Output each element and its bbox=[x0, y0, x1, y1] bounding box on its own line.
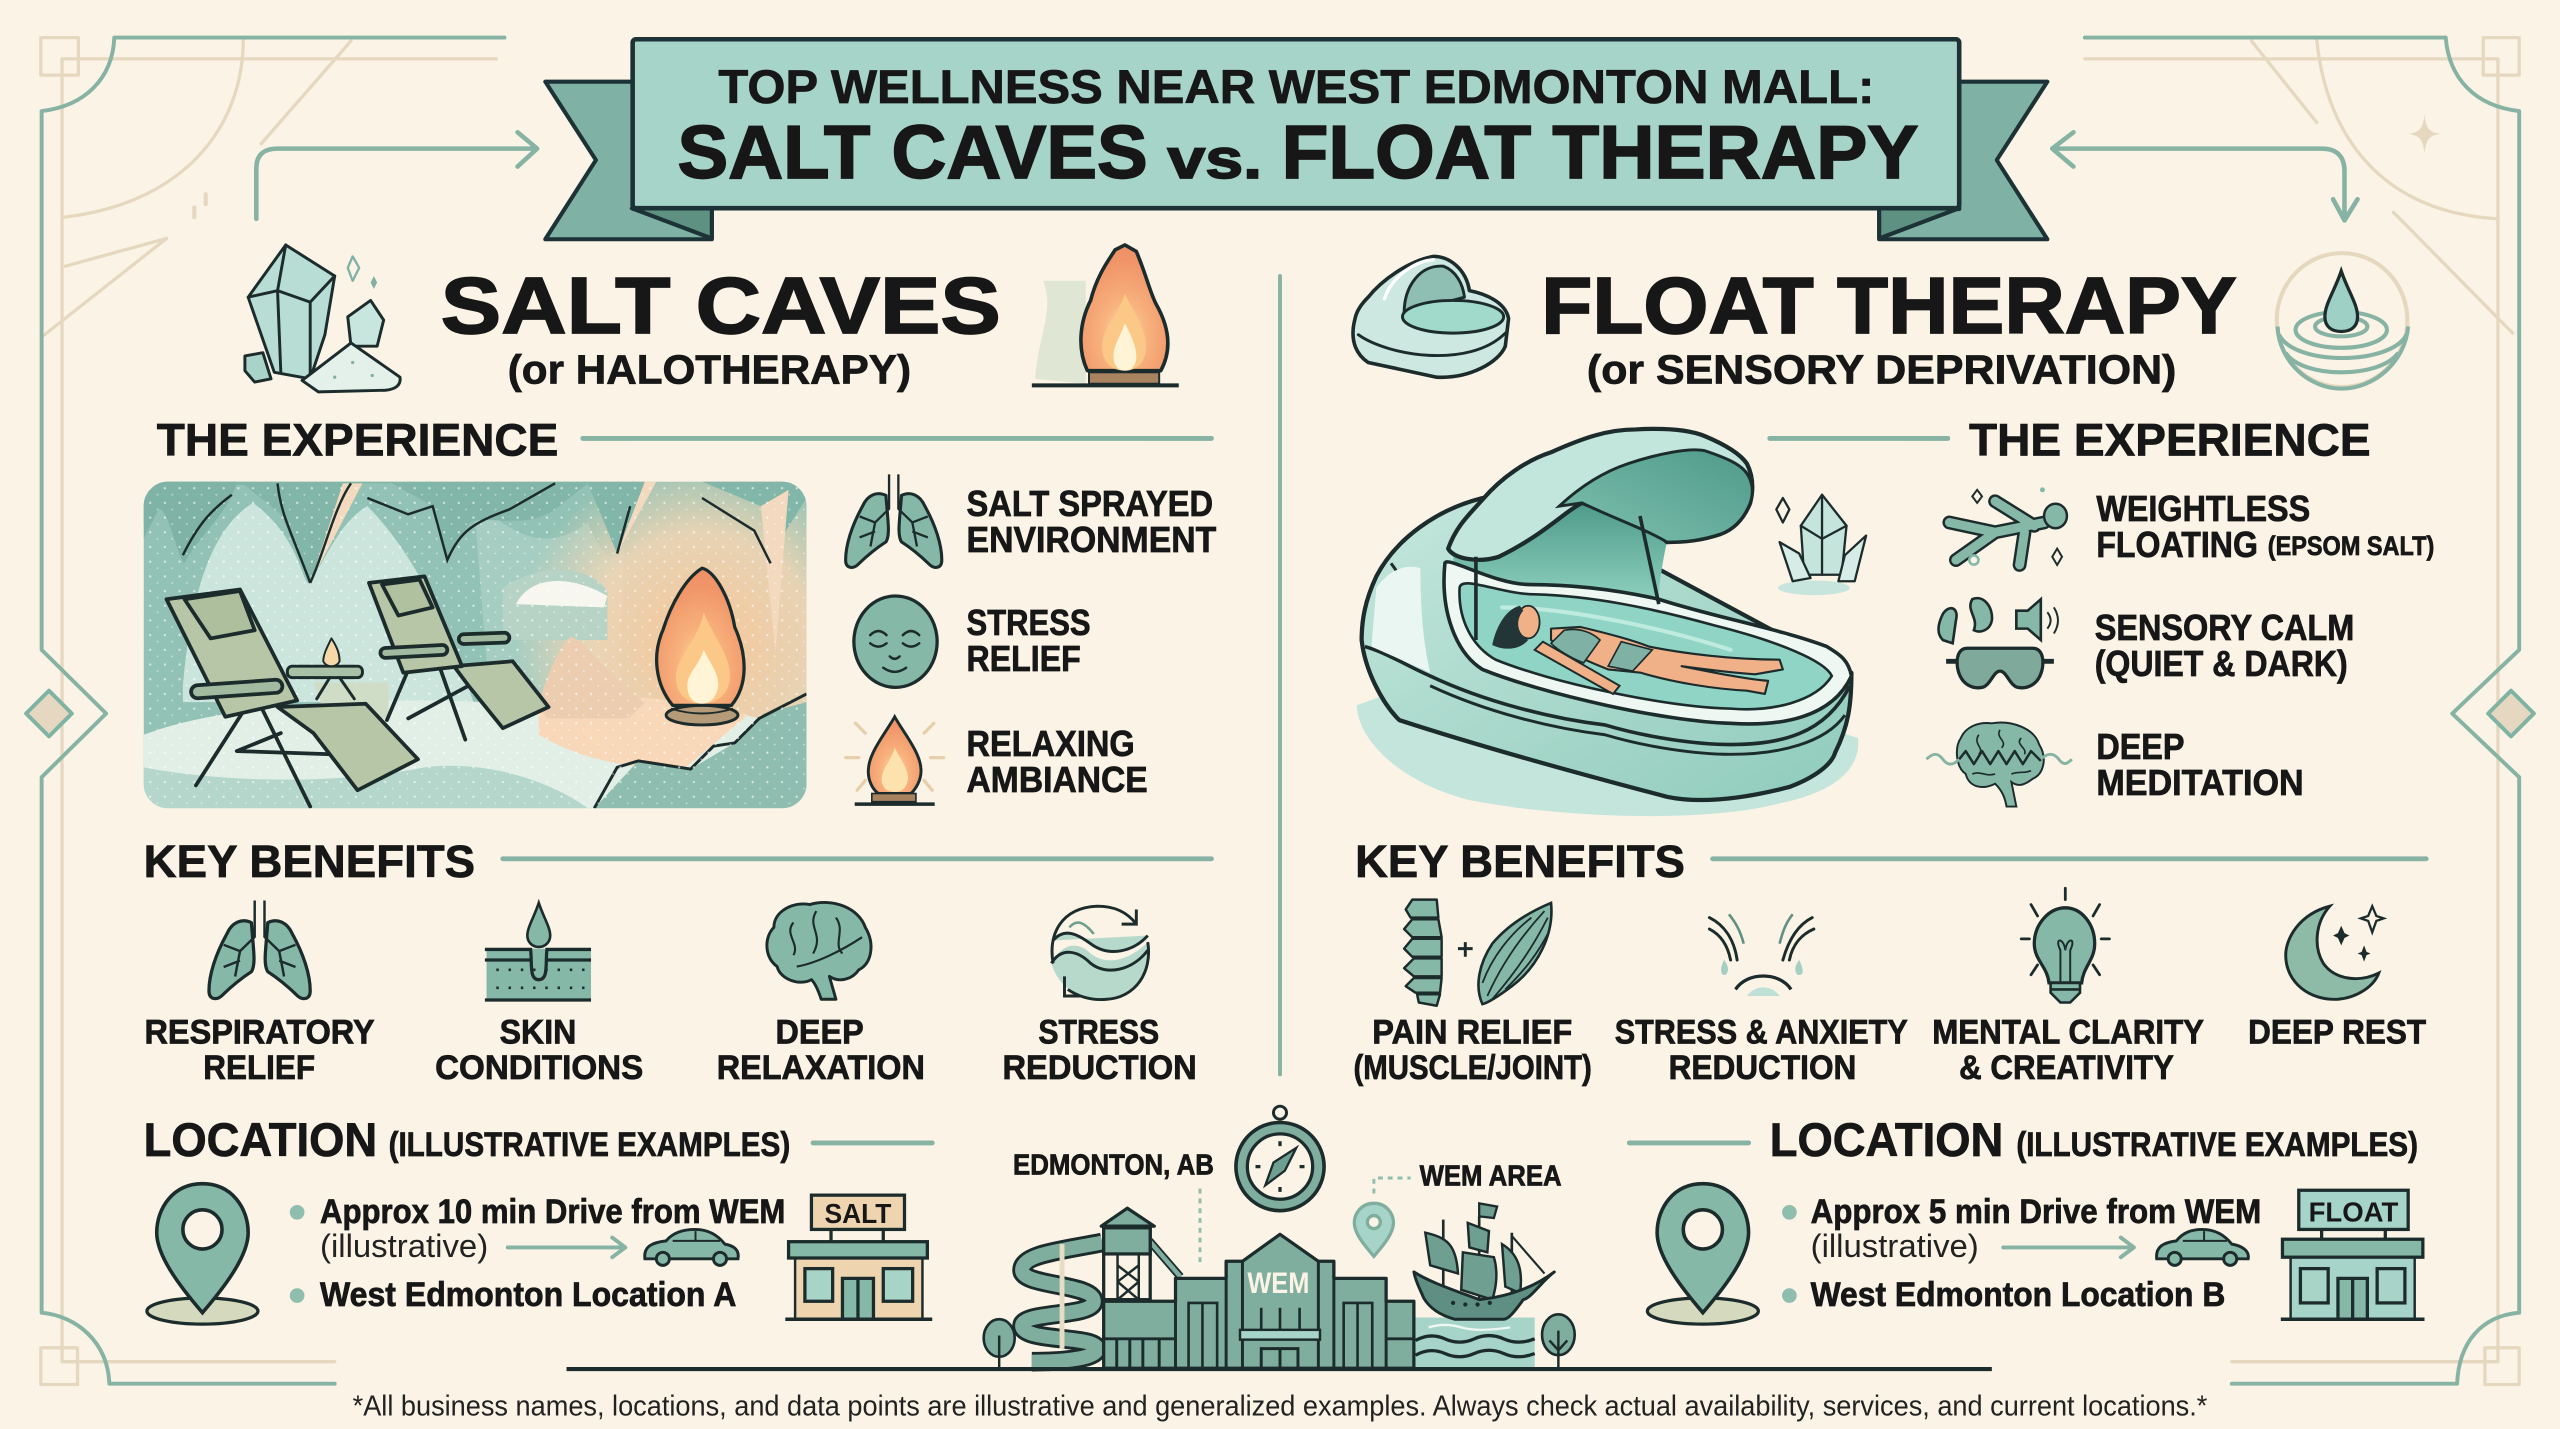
label note: (EPSOM SALT) bbox=[2268, 531, 2434, 561]
icon: tree, left bbox=[984, 1319, 1015, 1368]
title line 2 bbox=[678, 110, 1918, 194]
title line 2: vs. bbox=[1167, 128, 1262, 190]
glowing salt lamp bbox=[657, 568, 744, 725]
water bbox=[1459, 583, 1832, 709]
label: WEM area: WEM AREA bbox=[1420, 1160, 1562, 1192]
icon: lungs bbox=[846, 474, 942, 567]
small table and candle bbox=[287, 638, 389, 718]
label: DEEP bbox=[776, 1013, 864, 1051]
bullet bbox=[1782, 1288, 1797, 1303]
icon: skin layers with droplet bbox=[485, 903, 591, 1001]
ground line bbox=[567, 1368, 1992, 1370]
label line 2: REDUCTION bbox=[1669, 1049, 1856, 1087]
icon: car bbox=[2157, 1229, 2248, 1265]
experience item: weightless floating bbox=[1949, 487, 2434, 565]
benefit: pain relief bbox=[1353, 900, 1592, 1087]
label line 2: REDUCTION bbox=[1002, 1049, 1197, 1087]
label: RESPIRATORY bbox=[144, 1013, 375, 1051]
experience item: stress relief bbox=[854, 596, 1091, 687]
benefit: deep rest bbox=[2248, 906, 2426, 1051]
bullet bbox=[1782, 1205, 1797, 1220]
label: Edmonton, AB: EDMONTON, AB bbox=[1013, 1150, 1214, 1182]
label line 2: MEDITATION bbox=[2096, 762, 2304, 803]
note: (illustrative) bbox=[320, 1227, 488, 1264]
label: DEEP bbox=[2096, 726, 2184, 767]
note: (illustrative) bbox=[1811, 1227, 1979, 1264]
icon: brain bbox=[767, 903, 871, 999]
drive time: Approx 10 min Drive from WEM bbox=[320, 1193, 785, 1231]
label: PAIN RELIEF bbox=[1372, 1013, 1572, 1051]
bullet bbox=[290, 1288, 304, 1303]
mall building: WEM bbox=[1247, 1267, 1309, 1300]
experience item: relaxing ambiance bbox=[846, 717, 1148, 804]
drive time: Approx 5 min Drive from WEM bbox=[1811, 1193, 2261, 1231]
label line 2: ENVIRONMENT bbox=[967, 519, 1216, 560]
icon: galleon ship bbox=[1414, 1203, 1554, 1319]
arrow to car bbox=[2003, 1238, 2134, 1257]
icon: compass bbox=[1236, 1106, 1324, 1211]
benefit: skin conditions bbox=[435, 903, 643, 1087]
icon: moon and stars bbox=[2286, 906, 2384, 999]
label: SENSORY CALM bbox=[2095, 607, 2354, 648]
label line 2: RELIEF bbox=[203, 1049, 315, 1087]
icon: brain with wave bbox=[1927, 723, 2072, 807]
icon: WEM area pin bbox=[1354, 1203, 1393, 1256]
section heading: the experience, left: THE EXPERIENCE bbox=[157, 415, 558, 466]
illustration: float pod bbox=[1357, 429, 1858, 816]
icon: salt storefront: SALT bbox=[824, 1198, 891, 1229]
icon: water drop with ripples bbox=[2277, 253, 2408, 389]
icon: map pin bbox=[147, 1184, 258, 1324]
pod lower band bbox=[1365, 647, 1850, 745]
lounger, back bbox=[369, 576, 549, 740]
lounger, front bbox=[167, 589, 418, 807]
label: DEEP REST bbox=[2248, 1013, 2426, 1051]
location heading bbox=[144, 1114, 932, 1167]
label: MENTAL CLARITY bbox=[1932, 1013, 2204, 1051]
water slide tower bbox=[1022, 1208, 1180, 1362]
subheading: halotherapy: (or HALOTHERAPY) bbox=[508, 347, 911, 393]
hood bbox=[1448, 429, 1752, 560]
label line 2: & CREATIVITY bbox=[1959, 1049, 2174, 1087]
location heading: (ILLUSTRATIVE EXAMPLES) bbox=[2016, 1126, 2418, 1164]
benefit: deep relaxation bbox=[717, 903, 925, 1087]
icon: map pin bbox=[1647, 1184, 1758, 1324]
icon: lungs bbox=[209, 900, 310, 999]
section heading: the experience, right: THE EXPERIENCE bbox=[1969, 415, 2371, 466]
hood struts bbox=[1476, 516, 1659, 640]
icon: car bbox=[645, 1229, 738, 1265]
icon: mini float pod bbox=[1353, 256, 1509, 377]
central divider bbox=[1279, 276, 1281, 1074]
title line 2: SALT CAVES bbox=[678, 110, 1148, 194]
location: salt caves bbox=[144, 1114, 932, 1324]
right ribbon bbox=[1879, 82, 2047, 239]
illustration: salt cave with loungers and lamp bbox=[144, 482, 807, 808]
title banner bbox=[545, 39, 2047, 239]
section heading: key benefits, right: KEY BENEFITS bbox=[1355, 836, 1685, 887]
location heading bbox=[1629, 1114, 2418, 1167]
location: float therapy bbox=[1629, 1114, 2424, 1324]
heading: salt caves: SALT CAVES bbox=[441, 261, 1001, 350]
experience item: salt sprayed environment bbox=[846, 474, 1216, 567]
icon: crystal cluster bbox=[1776, 495, 1866, 595]
pod shadow bbox=[1357, 694, 1858, 816]
icon: spine and muscle bbox=[1404, 900, 1551, 1006]
experience item: deep meditation bbox=[1927, 723, 2304, 807]
dotted leader lines bbox=[1200, 1178, 1411, 1262]
icon: salt crystals bbox=[245, 245, 400, 392]
arrow: banner to top right bbox=[2052, 132, 2358, 220]
heading: float therapy: FLOAT THERAPY bbox=[1541, 261, 2237, 350]
footnote: *All business names, locations, and data points are illustrative and generalized examples. Always check actual availability, services, and current locations.* bbox=[353, 1391, 2207, 1423]
location heading: LOCATION bbox=[1770, 1114, 2003, 1167]
label: RELAXING bbox=[967, 723, 1135, 764]
icon: ears, speaker and eye mask bbox=[1939, 598, 2058, 688]
icon: light bulb bbox=[2021, 888, 2109, 1002]
label: STRESS & ANXIETY bbox=[1615, 1013, 1908, 1051]
icon: float storefront: FLOAT bbox=[2309, 1196, 2398, 1227]
label line 2: (MUSCLE/JOINT) bbox=[1353, 1049, 1592, 1087]
benefit: respiratory relief bbox=[144, 900, 375, 1087]
title line 2: FLOAT THERAPY bbox=[1282, 110, 1918, 194]
icon: floating figure bbox=[1949, 487, 2067, 565]
mall building bbox=[1104, 1234, 1414, 1368]
icon: waves in cycle arrows bbox=[1051, 906, 1149, 1000]
label: SKIN bbox=[500, 1013, 576, 1051]
icon: tree, right bbox=[1542, 1314, 1575, 1368]
location heading: (ILLUSTRATIVE EXAMPLES) bbox=[389, 1126, 790, 1164]
section heading: key benefits, left: KEY BENEFITS bbox=[144, 836, 475, 887]
label: STRESS bbox=[967, 602, 1091, 643]
floating person bbox=[1492, 606, 1783, 694]
label: WEIGHTLESS bbox=[2096, 488, 2310, 529]
label line 2: RELIEF bbox=[967, 638, 1081, 679]
arrow: top left to banner bbox=[256, 132, 537, 219]
icon: easing tension bbox=[1709, 914, 1814, 996]
icon: flame bbox=[846, 717, 944, 804]
decorative frame: right bbox=[2085, 38, 2534, 1385]
left ribbon bbox=[545, 82, 712, 239]
label line 2: (QUIET & DARK) bbox=[2095, 643, 2348, 684]
label line 2: CONDITIONS bbox=[435, 1049, 643, 1087]
title line 1: TOP WELLNESS NEAR WEST EDMONTON MALL: bbox=[718, 61, 1874, 114]
label: STRESS bbox=[1038, 1013, 1159, 1051]
label line 2: FLOATING bbox=[2096, 524, 2258, 565]
address: West Edmonton Location B bbox=[1811, 1276, 2225, 1314]
benefit: stress and anxiety reduction bbox=[1615, 914, 1908, 1087]
subheading: sensory deprivation: (or SENSORY DEPRIVATION) bbox=[1587, 347, 2176, 393]
tub rim bbox=[1444, 562, 1851, 724]
pod interior wall bbox=[1453, 503, 1667, 601]
icon: salt lamp bbox=[1032, 245, 1179, 385]
location heading: LOCATION bbox=[144, 1114, 377, 1167]
icon: float storefront bbox=[2281, 1190, 2424, 1319]
banner panel bbox=[633, 39, 1959, 208]
experience item: sensory calm bbox=[1939, 598, 2354, 688]
label: SALT SPRAYED bbox=[967, 483, 1213, 524]
decorative frame: left bbox=[26, 38, 504, 1385]
icon: salt storefront bbox=[785, 1195, 932, 1319]
label line 2: RELAXATION bbox=[717, 1049, 925, 1087]
benefit: mental clarity and creativity bbox=[1932, 888, 2204, 1087]
icon: calm face bbox=[854, 596, 937, 687]
map: West Edmonton Mall skyline bbox=[567, 1106, 1992, 1369]
bullet bbox=[290, 1205, 304, 1220]
address: West Edmonton Location A bbox=[320, 1276, 736, 1314]
arrow to car bbox=[508, 1238, 625, 1257]
label line 2: AMBIANCE bbox=[967, 759, 1148, 800]
pod shell bbox=[1362, 498, 1851, 800]
water bbox=[1416, 1318, 1535, 1368]
benefit: stress reduction bbox=[1002, 906, 1197, 1087]
